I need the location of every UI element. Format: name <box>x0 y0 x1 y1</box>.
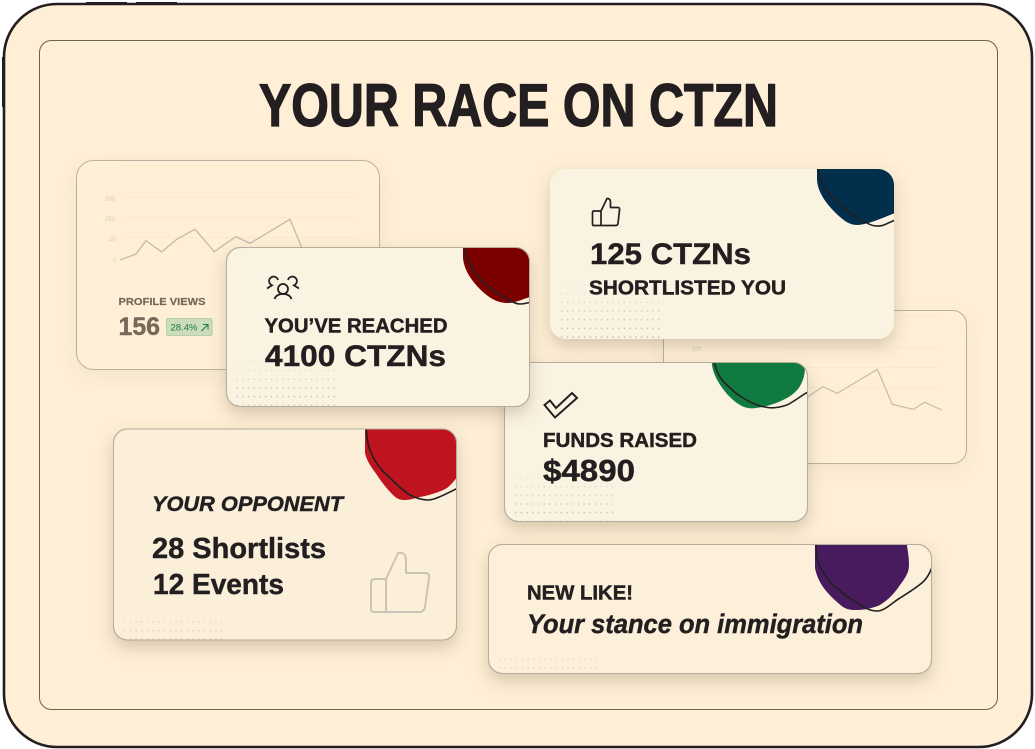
stat: 12 events: 12 Events <box>153 569 284 601</box>
green blob <box>712 363 807 409</box>
navy blob <box>817 169 894 227</box>
dot texture <box>497 655 601 673</box>
line chart: profile views <box>105 166 354 264</box>
panel: your opponent <box>114 420 458 640</box>
line chart: profile views: 500 <box>105 197 116 203</box>
label: funds raised: FUNDS RAISED <box>543 430 697 452</box>
text: your stance on immigration: Your stance on immigration <box>527 609 863 639</box>
icon: faded thumbs up <box>371 553 429 612</box>
panel: funds raised <box>504 355 808 522</box>
dot texture <box>515 478 614 522</box>
line chart: profile views: 0 <box>113 258 117 264</box>
line chart: profile views: 10 <box>109 237 116 243</box>
panel: profile views chart <box>76 160 380 370</box>
panel: you've reached <box>226 240 531 406</box>
panel: secondary chart <box>664 310 966 464</box>
value: 156: 156 <box>118 313 160 341</box>
value: 125 CTZNs: 125 CTZNs <box>590 238 751 271</box>
label: profile views: PROFILE VIEWS <box>118 296 206 308</box>
purple blob <box>815 538 932 611</box>
dot texture <box>236 362 335 406</box>
line chart: secondary <box>692 316 942 410</box>
title: YOUR RACE ON CTZN <box>259 72 778 139</box>
dot texture <box>561 284 660 338</box>
badge: 28.4% up <box>166 318 212 336</box>
heading: new like: NEW LIKE! <box>527 582 633 604</box>
stat: 28 shortlists: 28 Shortlists <box>152 533 326 565</box>
value: 4100 CTZNs: 4100 CTZNs <box>265 340 446 373</box>
panel: new like <box>488 538 932 674</box>
label: shortlisted you: SHORTLISTED YOU <box>589 278 786 300</box>
value: $4890: $4890 <box>543 453 635 488</box>
badge: 28.4% up: 28.4% <box>170 322 198 334</box>
heading: you've reached: YOU’VE REACHED <box>264 316 448 338</box>
icon: people <box>267 277 299 299</box>
icon: thumbs up <box>592 198 620 226</box>
panel: shortlisted <box>550 160 895 339</box>
dark red blob <box>463 248 529 305</box>
line chart: profile views: 250 <box>105 217 116 223</box>
icon: check mark <box>544 393 577 418</box>
line chart: secondary: 500 <box>692 347 703 353</box>
heading: your opponent: YOUR OPPONENT <box>152 493 345 516</box>
dot texture <box>124 612 222 640</box>
red blob <box>365 430 456 501</box>
